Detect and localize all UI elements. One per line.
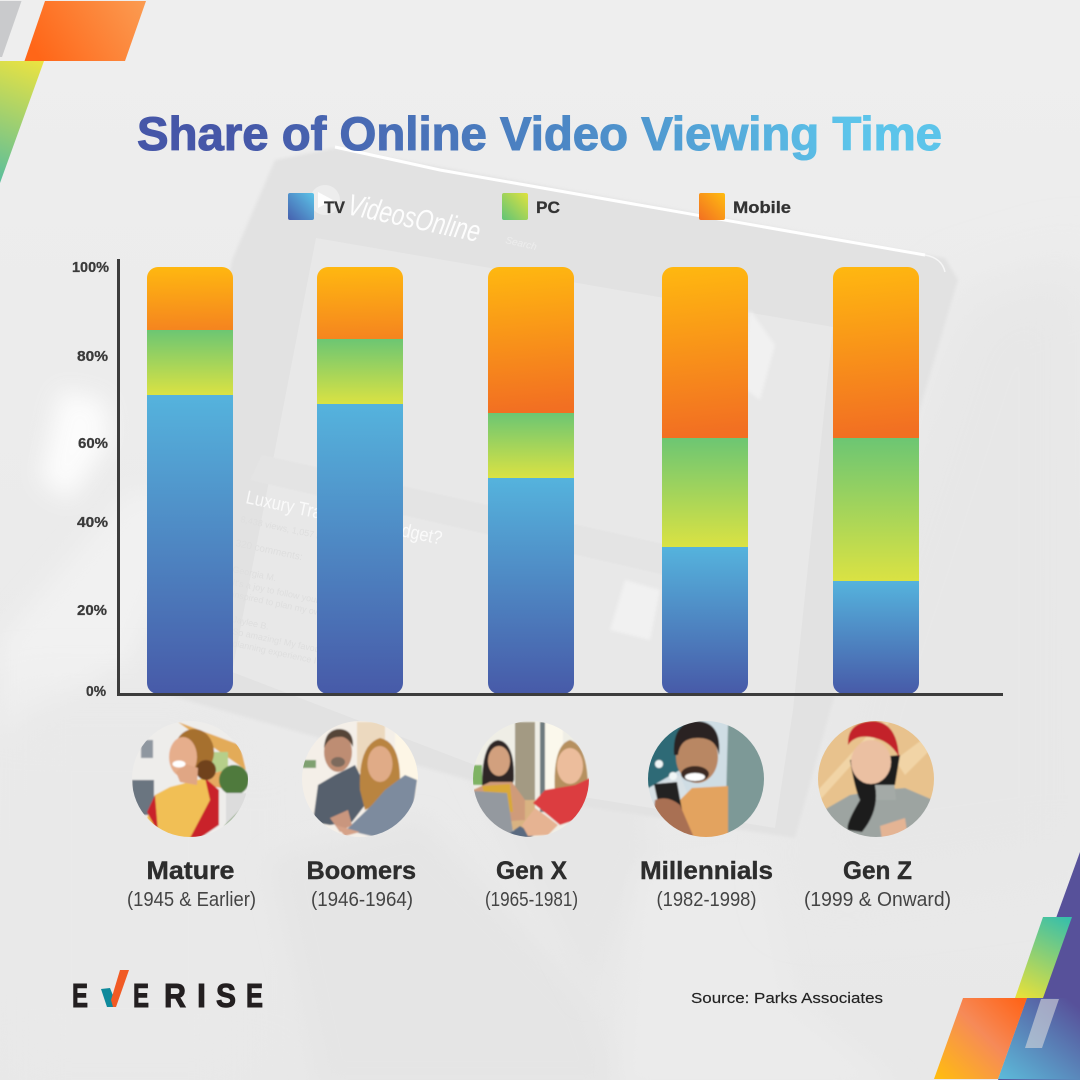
top-left corner accent shapes [0,1,146,183]
y-axis labels [72,260,109,700]
legend item: TV [288,193,346,220]
background photo: hand holding tablet: planning experience I feel fortunate [232,638,371,677]
label: Gen X: (1965-1981) [485,889,578,911]
label: Gen Z: Gen Z [843,857,912,885]
y-axis labels: 80% [77,349,108,365]
background photo: hand holding tablet: So amazing! My favourite travel [232,626,357,662]
label: Millennials [640,857,773,911]
source note: Source: Parks Associates [691,990,883,1007]
background photo: hand holding tablet: 8,438 views, 1,057 likes [240,514,336,544]
logo: Everise: E [246,977,263,1014]
photo: Mature, laughing woman [130,720,250,840]
y-axis labels: 0% [86,684,106,700]
chart axes [117,259,1003,696]
photo: Gen X, two women with laptop [473,721,589,837]
logo: Everise [72,970,263,1014]
legend [288,193,791,220]
background photo: hand holding tablet: Search [504,235,538,253]
y-axis labels: 20% [77,603,107,619]
bar: Boomers [317,267,403,694]
label: Gen Z: (1999 & Onward) [804,889,951,911]
photo: Boomers, smiling couple [300,720,420,840]
label: Millennials: (1982-1998) [656,889,756,911]
legend item: TV: TV [324,198,346,217]
title: Share of Online Video Viewing Time [137,107,942,160]
logo: Everise: S [216,977,236,1014]
background photo: hand holding tablet: Jaylee B. [232,614,270,632]
label: Gen Z [804,857,951,911]
bar: Mature [147,267,233,694]
label: Boomers [306,857,416,911]
y-axis labels: 60% [78,436,108,452]
background photo: hand holding tablet: Luxury Travel on a Budget? [244,487,444,549]
logo: Everise: R [164,977,186,1014]
generation labels [127,857,951,911]
bar: Gen Z [833,267,919,694]
legend item: Mobile: Mobile [733,198,791,217]
background photo: hand holding tablet: 320 comments: [234,538,304,563]
photo: Millennials, man with phone [648,721,764,837]
logo: Everise: E [133,977,149,1014]
legend item: PC: PC [536,198,560,217]
background photo: hand holding tablet: VideosOnline [345,189,483,249]
legend item: Mobile [699,193,791,220]
logo: Everise: E [72,977,88,1014]
logo: Everise: I [197,977,206,1014]
label: Gen X: Gen X [496,857,567,885]
bar: Millennials [662,267,748,694]
photo: Gen Z, woman in red beanie [818,721,934,837]
label: Boomers: (1946-1964) [311,889,413,911]
y-axis labels: 100% [72,260,109,276]
label: Gen X [485,857,578,911]
background photo: hand holding tablet: inspired to plan my own trip [232,589,341,622]
label: Mature: Mature [146,857,235,885]
bar: Gen X [488,267,574,694]
label: Boomers: Boomers [306,857,416,885]
background photo: hand holding tablet: Georgia M. [232,564,277,583]
label: Mature: (1945 & Earlier) [127,889,256,911]
stacked bar chart [147,267,919,694]
legend item: PC [502,193,560,220]
y-axis labels: 40% [77,515,108,531]
label: Millennials: Millennials [640,857,773,885]
bottom-right corner accent shapes [934,852,1080,1080]
background photo: hand holding tablet: It's a joy to follow your adventures [232,577,366,615]
label: Mature [127,857,256,911]
